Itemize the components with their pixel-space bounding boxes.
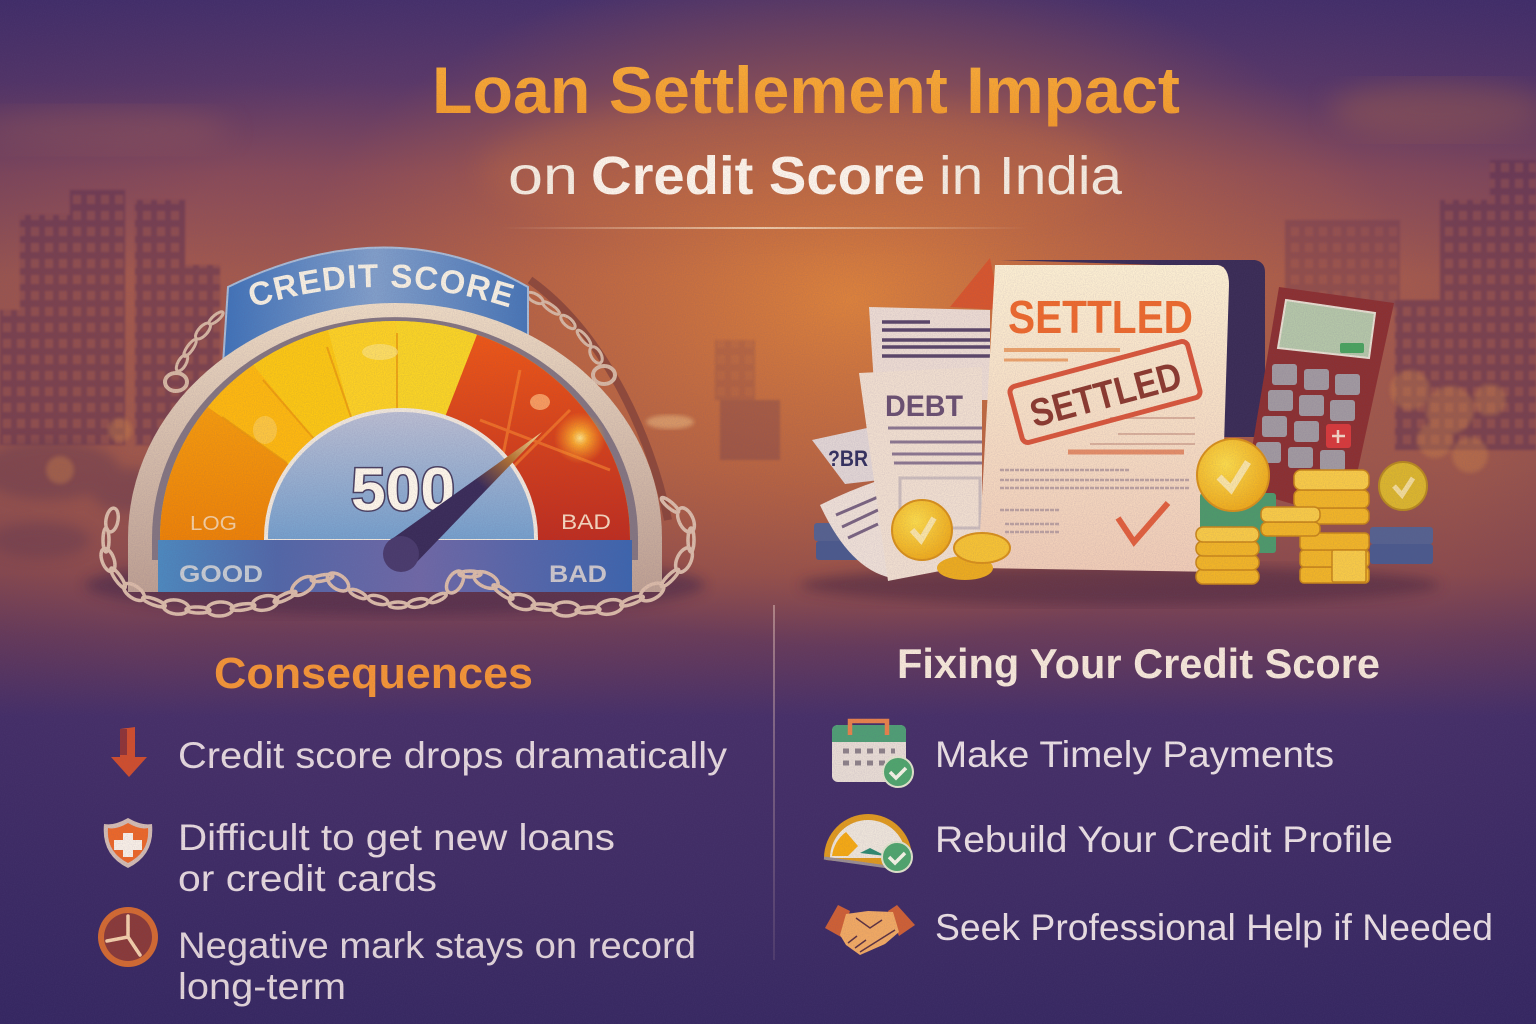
gauge: outer ring — [128, 303, 662, 592]
settled stamp: SETTLED — [1025, 355, 1186, 436]
text: negative mark — [178, 925, 696, 1007]
blue ledger stacks — [814, 523, 1433, 564]
icon: shield — [104, 818, 152, 868]
icon: down arrow — [111, 727, 147, 777]
gauge: upper left chain — [165, 310, 225, 391]
gauge: inner edge — [152, 317, 638, 560]
back binder — [1000, 260, 1265, 437]
text: difficult to get new loans: Difficult to get new loans — [178, 817, 615, 858]
background: left shrub band — [0, 440, 170, 558]
text: rebuild credit profile: Rebuild Your Credit Profile — [935, 819, 1393, 860]
text: make timely payments: Make Timely Payments — [935, 734, 1334, 775]
calculator — [1245, 287, 1394, 520]
gauge: upper BAD label: BAD — [561, 511, 611, 534]
gauge: upper right chain — [525, 290, 615, 384]
icon: handshake — [825, 905, 915, 955]
right gold stacks — [1196, 470, 1369, 584]
gauge: shadow — [85, 555, 705, 615]
gauge: GOOD label: GOOD — [179, 561, 263, 588]
gauge: lower chain — [98, 496, 698, 617]
gauge: brown strap — [530, 280, 668, 520]
title rule — [500, 227, 1030, 229]
column divider — [773, 605, 775, 960]
gauge: lower BAD label: BAD — [549, 561, 607, 588]
gauge: banner — [222, 248, 528, 380]
heading: consequences: Consequences — [214, 649, 533, 698]
gauge: credit score meter — [83, 246, 707, 618]
curled paper — [820, 480, 892, 578]
background: warm bokeh lights — [46, 370, 1506, 484]
text: negative mark: Negative mark stays on record — [178, 925, 696, 966]
orange folder behind — [950, 258, 1000, 310]
check mark — [1118, 503, 1168, 542]
ground shadow — [800, 565, 1440, 605]
background: right city skyline — [1285, 160, 1536, 450]
text: seek professional help: Seek Professional Help if Needed — [935, 907, 1493, 948]
gauge: blue centre dial — [266, 410, 536, 541]
small check coin — [1379, 462, 1427, 510]
debt document — [859, 367, 982, 581]
text: difficult to get new loans — [178, 817, 615, 899]
heading: fixing your credit score: Fixing Your Credit Score — [897, 640, 1380, 687]
main settled document — [978, 265, 1229, 572]
subtitle: on — [508, 146, 578, 206]
icon: small gauge — [824, 814, 912, 872]
gauge: score value: 500 — [351, 456, 455, 523]
left coins — [892, 500, 1010, 580]
gauge: lower bar — [158, 540, 632, 592]
illustration: settled documents and coins — [800, 258, 1440, 605]
gauge: banner text: CREDIT SCORE — [250, 264, 514, 308]
icon: clock — [98, 907, 158, 967]
large check coin — [1197, 439, 1269, 511]
icon: calendar — [832, 721, 913, 787]
question paper — [812, 428, 880, 484]
background: left city skyline — [0, 190, 780, 460]
text: difficult to get new loans: or credit cards — [178, 858, 437, 899]
settled heading: SETTLED — [1008, 291, 1193, 343]
gauge: coloured sectors — [160, 321, 630, 540]
gauge: LOG label: LOG — [190, 513, 237, 535]
question paper: ?BR — [828, 446, 868, 471]
title: Loan Settlement Impact — [432, 53, 1180, 127]
debt heading: DEBT — [885, 390, 963, 423]
gauge: needle spark — [554, 412, 694, 464]
subtitle — [508, 146, 1123, 206]
subtitle: Credit Score — [591, 146, 925, 206]
subtitle: in India — [939, 146, 1123, 206]
text: credit score drops: Credit score drops dramatically — [178, 735, 728, 776]
green cash — [1200, 493, 1276, 553]
gauge: needle — [383, 432, 542, 572]
text: negative mark: long-term — [178, 966, 346, 1007]
back document with lines — [869, 307, 990, 400]
